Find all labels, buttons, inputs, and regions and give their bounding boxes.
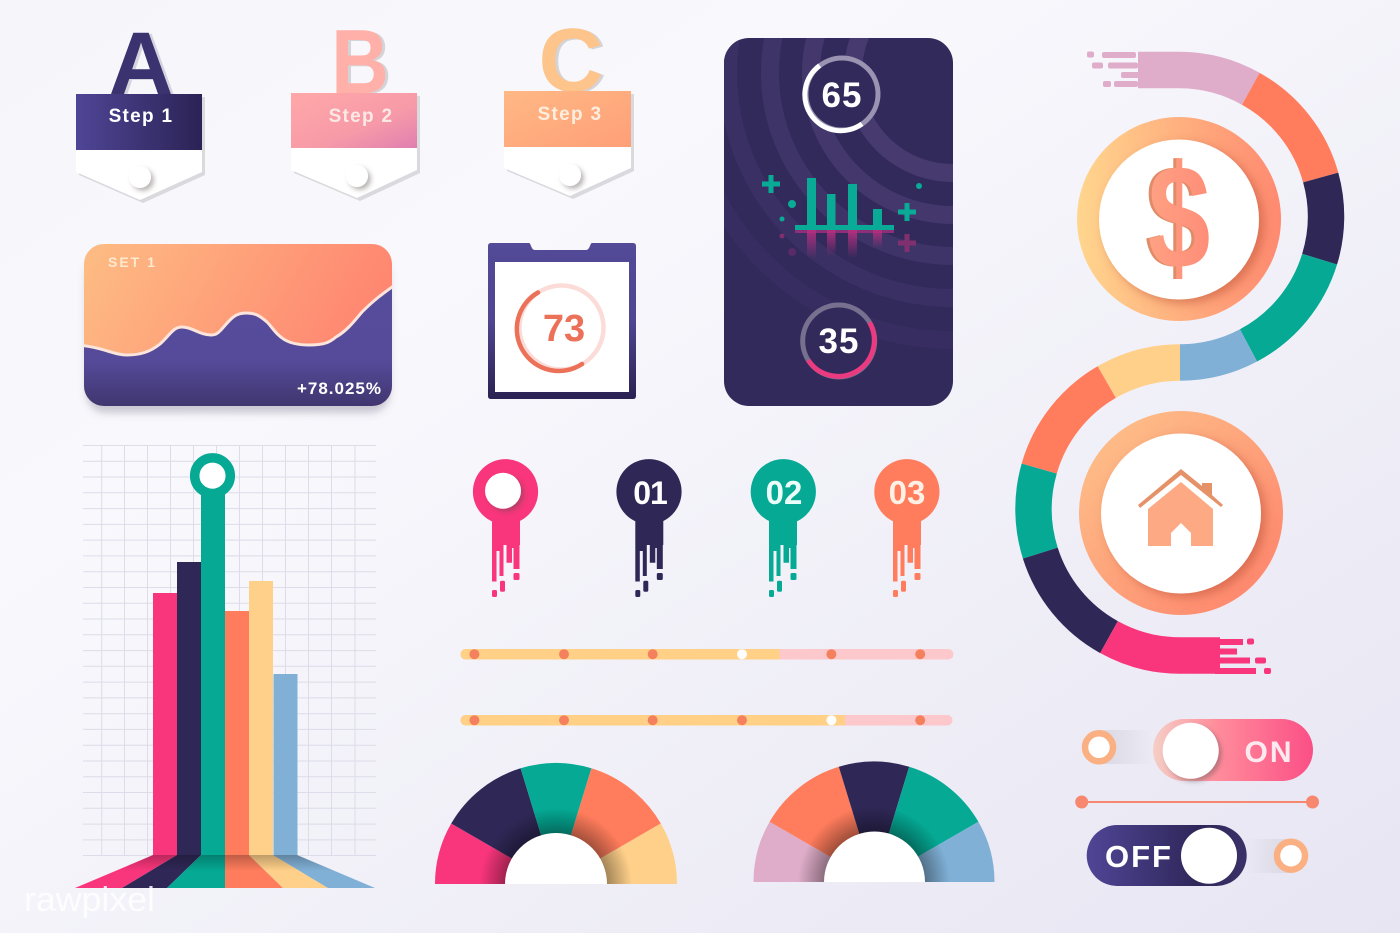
toggle dot [559,164,581,186]
toggle: off: OFF [1105,839,1173,874]
step 2 label: Step 2 [329,106,393,127]
slider 2 [460,715,952,726]
set label: SET 1 [108,254,157,270]
slider handle [737,649,747,659]
area chart card [70,244,405,420]
bar chart [75,458,375,888]
bar: navy [177,562,201,855]
bar: pink [153,593,177,855]
speed lines: top [1087,52,1139,87]
progress ring [517,286,604,371]
toggle dot [129,166,151,188]
bar reflection [780,230,916,258]
bar chart grid [83,445,376,856]
coin: dollar [1077,117,1281,321]
gauge 35: 35 [819,322,859,361]
step 1 label: Step 1 [109,106,173,127]
pin: pink [473,459,538,597]
mini bar chart [762,175,922,230]
step 3 label: Step 3 [538,104,602,125]
semicircle gauge 1 [435,762,677,884]
bar: orange [225,611,249,855]
pin: 01: 01 [633,475,667,511]
percentage label: +78.025% [297,379,382,398]
letter C: C [538,11,604,111]
step 1 label [76,94,202,150]
bar: teal with ring [195,458,230,855]
semicircle gauge 2 [754,761,994,882]
icon: house [1138,469,1223,546]
coin: house [1079,411,1283,615]
icon: dollar sign: $ [1145,134,1207,300]
gauge 35 [803,305,875,377]
badge: step B: B [334,12,392,114]
connector line [1075,796,1319,808]
letter A: A [108,15,174,115]
bar: blue [274,674,298,855]
toggle: off [1087,825,1305,886]
slider 1 [460,649,954,660]
badge: step C: C [542,12,606,112]
pin: 03: 03 [889,474,925,511]
perspective floor [75,855,375,888]
letter B: B [331,11,389,113]
badge: step B [291,11,420,201]
pin: 03 [874,459,940,597]
bar: yellow [249,581,273,855]
pin: 02 [751,459,816,597]
lower arc [1107,362,1180,382]
speed lines: bottom [1215,638,1271,674]
watermark: rawpixel [24,881,155,919]
slider handle [826,715,836,725]
step 2 label [291,93,417,148]
icon: dollar sign: $ [1148,134,1210,300]
pin hole [485,473,521,509]
S-shaped ribbon [1034,70,1326,656]
toggle: on [1085,719,1313,781]
gauge 65: 65 [822,76,862,115]
pin: 01 [616,459,682,597]
badge: step C [504,11,634,199]
toggle: on: ON [1244,736,1294,769]
pin: 02: 02 [766,474,802,511]
step 3 label [504,91,631,147]
gauge 65 [805,58,878,131]
toggle dot [346,165,368,187]
calendar gauge card [488,243,636,399]
upper arc [1138,70,1251,89]
badge: step A [76,15,205,203]
concentric rings [724,38,953,307]
dark dashboard card [724,38,953,406]
badge: step A: A [112,16,176,116]
value 73: 73 [543,308,585,350]
